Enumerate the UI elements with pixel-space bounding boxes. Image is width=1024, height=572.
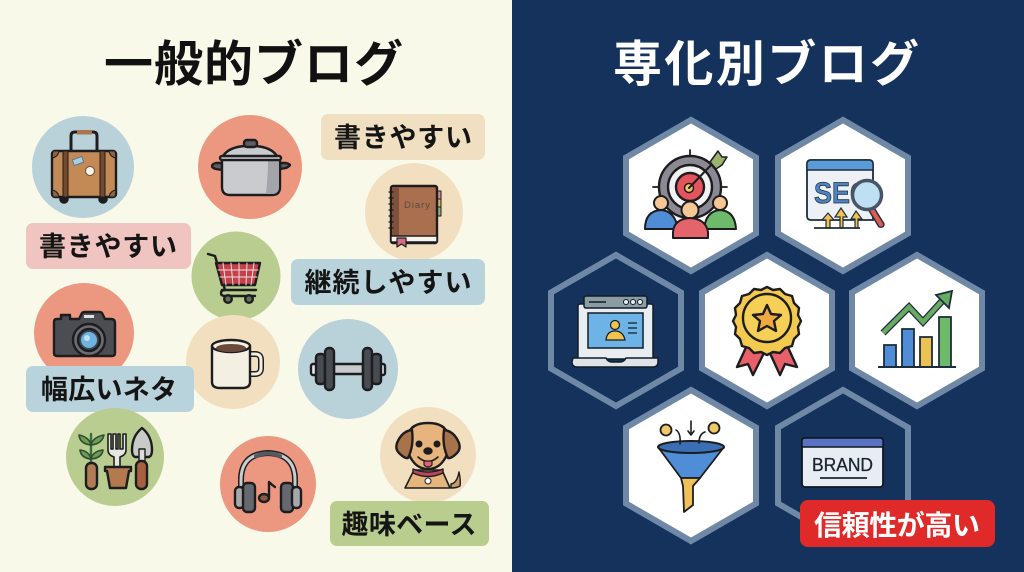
- icon: dog: [380, 407, 476, 503]
- heading: general blog: 一般的ブログ: [104, 38, 403, 92]
- icon: shopping cart: [192, 232, 280, 320]
- icon: award rosette: [733, 287, 801, 375]
- icon: brand window: [802, 438, 883, 487]
- icon: headphones: [220, 436, 316, 532]
- label: hobby based: [330, 501, 489, 546]
- label: wide range of topics: 幅広いネタ: [41, 375, 177, 405]
- label: easy to write (tan): [321, 114, 485, 160]
- panel: specialized blog: [512, 0, 1024, 572]
- label: high credibility: 信頼性が高い: [814, 509, 980, 541]
- label: easy to write (pink): [26, 223, 191, 269]
- label: easy to write (tan): 書きやすい: [334, 123, 472, 153]
- label: hobby based: 趣味ベース: [342, 510, 476, 540]
- icon: growth chart: [878, 291, 956, 367]
- icon: dumbbell: [298, 319, 398, 419]
- panel: general blog: [0, 0, 512, 572]
- label: easy to write (pink): 書きやすい: [39, 232, 177, 262]
- icon: gardening tools: [66, 408, 164, 506]
- icon: SEO browser: SEO: [814, 177, 871, 210]
- icon: diary: Diary: [404, 200, 430, 211]
- icon: SEO browser: [807, 160, 884, 228]
- icon: camera: [34, 283, 134, 383]
- label: easy to continue: [291, 259, 485, 305]
- icon: coffee mug: [186, 315, 280, 409]
- icon: cooking pot: [198, 115, 302, 219]
- icon: target with people: [645, 150, 736, 238]
- label: easy to continue: 継続しやすい: [304, 268, 472, 298]
- icon: suitcase: [32, 116, 134, 218]
- icon: laptop: [572, 296, 658, 367]
- icon: brand window: BRAND: [812, 455, 873, 475]
- label: high credibility: [800, 500, 995, 547]
- hexagon: sales funnel: [626, 390, 756, 541]
- icon: diary: [365, 163, 463, 261]
- hexagon: growth chart: [852, 255, 982, 406]
- label: wide range of topics: [26, 366, 194, 412]
- hexagon: SEO: [778, 120, 908, 271]
- hexagon: target audience: [626, 120, 756, 271]
- hexagon: award: [702, 255, 832, 406]
- heading: specialized blog: 専化別ブログ: [613, 38, 919, 92]
- icon: funnel: [658, 421, 724, 512]
- hexagon: brand: [778, 390, 908, 541]
- hexagon: laptop profile: [551, 255, 681, 406]
